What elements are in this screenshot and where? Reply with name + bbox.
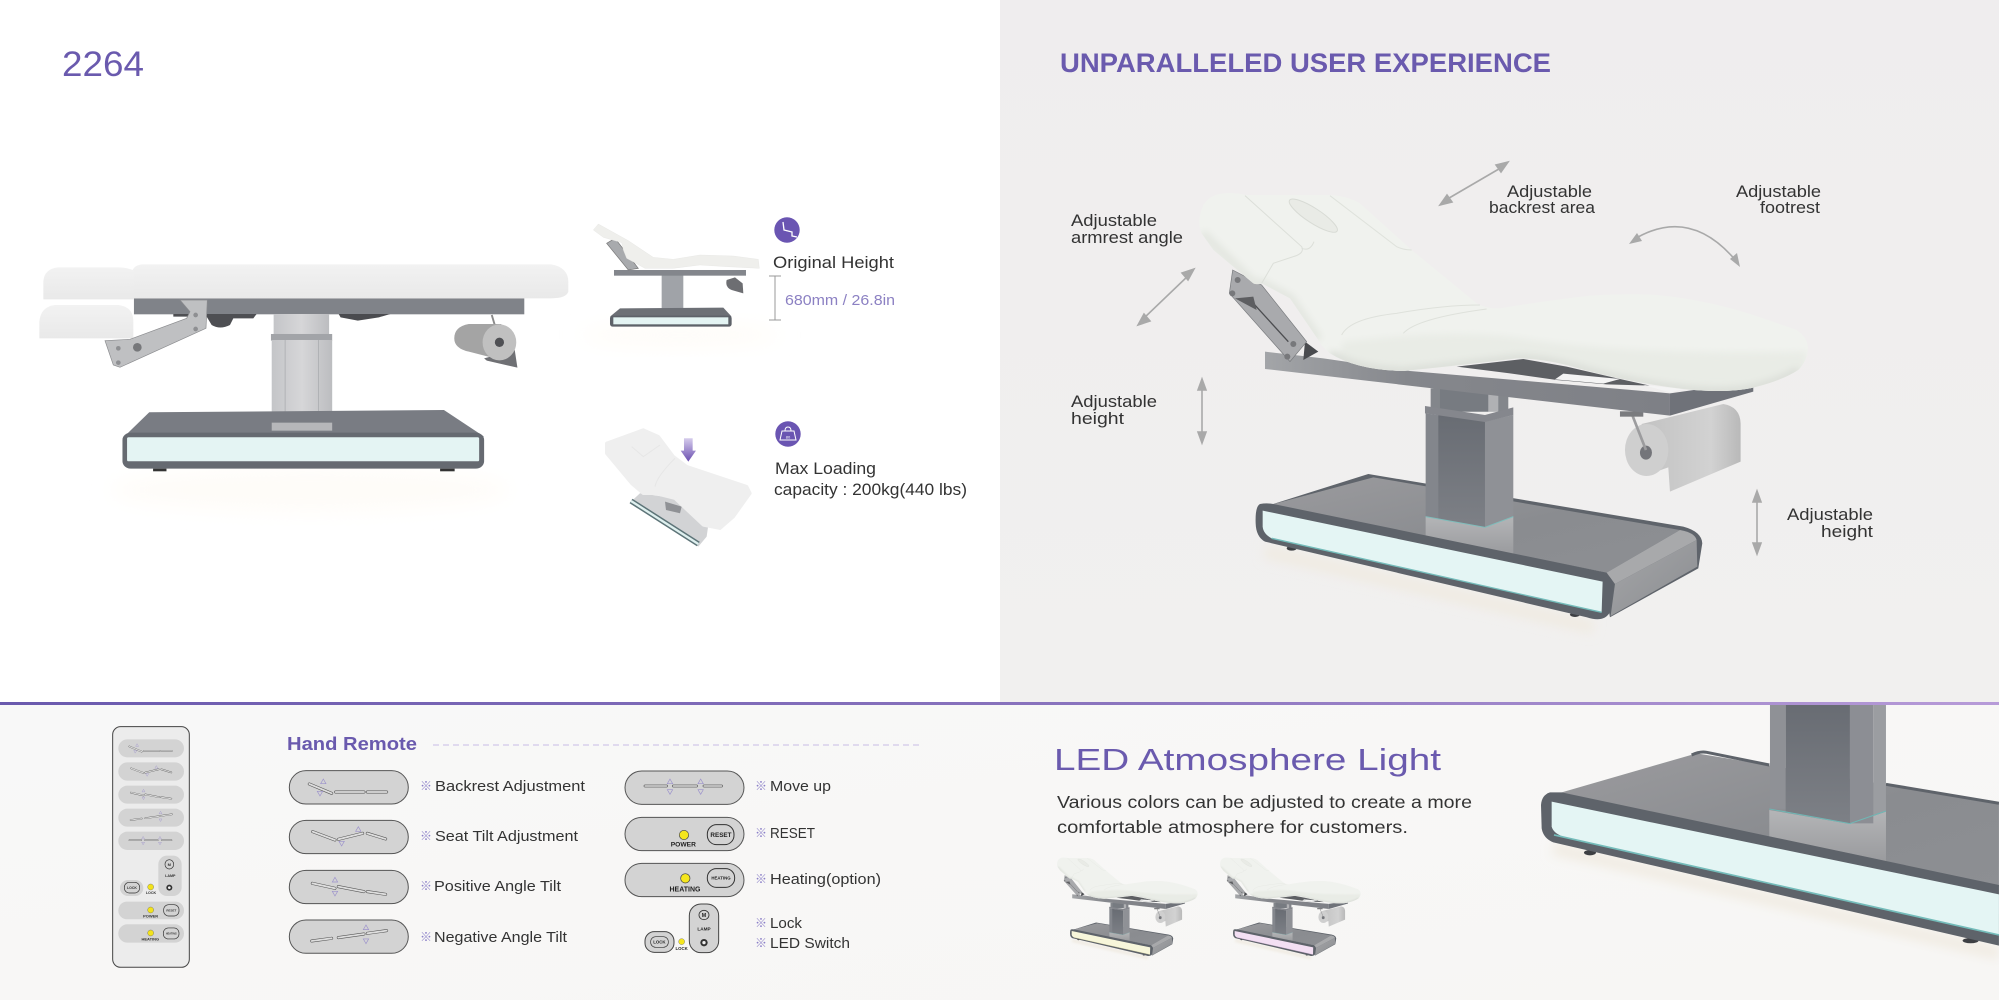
label: height left: Adjustable (1071, 393, 1157, 411)
label: height left: height (1071, 410, 1125, 428)
panel: remote control: LAMP (165, 874, 176, 878)
labels: right button column: ※ (755, 779, 767, 793)
icon: weight (775, 421, 801, 447)
label: footrest: footrest (1760, 199, 1821, 217)
labels: right button column: Move up (770, 778, 831, 795)
panel: remote control: HEATING (142, 937, 159, 942)
label: height right (1787, 506, 1874, 541)
panel: remote control: POWER (143, 913, 158, 918)
armrest cushion (39, 305, 133, 338)
icon: chair height (774, 217, 800, 243)
button: move up (625, 771, 744, 804)
button: reset (625, 817, 744, 851)
labels: left button column: Backrest Adjustment (435, 778, 586, 795)
labels: left button column: Seat Tilt Adjustment (435, 828, 579, 845)
heading: LED atmosphere light: LED Atmosphere Light (1054, 742, 1441, 777)
labels: left button column: ※ (420, 879, 432, 893)
panel: remote control: HEATING (166, 933, 177, 936)
image: small bed with pink light (1220, 858, 1361, 958)
button: heating (625, 863, 744, 897)
label: height left (1071, 393, 1157, 428)
buttons: lamp and lock: LOCK (676, 946, 689, 951)
button: reset: RESET (710, 832, 732, 839)
head cushion (43, 267, 134, 299)
labels: left button column: ※ (420, 829, 432, 843)
label: backrest area: backrest area (1489, 199, 1596, 217)
label: armrest angle (1071, 212, 1183, 247)
text: max loading (774, 460, 967, 499)
bracket (105, 300, 207, 367)
label: height right: Adjustable (1787, 506, 1873, 524)
label: backrest area: Adjustable (1507, 183, 1592, 201)
labels: right button column: ※ (755, 872, 767, 886)
button: heating: HEATING (711, 876, 731, 881)
under-frame mechanism (173, 314, 257, 327)
mattress (132, 264, 568, 298)
arrow: load down (681, 438, 696, 462)
buttons: lamp and lock: LOCK (653, 940, 666, 945)
panel: grey user experience background (1000, 0, 1999, 702)
heading: unparalleled user experience: UNPARALLELED USER EXPERIENCE (1060, 48, 1551, 78)
text: height value: 680mm / 26.8in (785, 292, 895, 309)
labels: right button column: RESET (770, 825, 815, 842)
label: height right: height (1821, 523, 1874, 541)
label: armrest angle: armrest angle (1071, 229, 1183, 247)
panel: bottom background (0, 705, 1999, 1000)
button: backrest adjustment (289, 771, 408, 804)
labels: right button column (755, 778, 881, 952)
arrow: curved footrest (1629, 227, 1740, 267)
labels: left button column (420, 778, 586, 946)
height dimension bracket (769, 276, 781, 320)
heading: hand remote: Hand Remote (287, 733, 417, 754)
panel: remote control: LOCK (146, 891, 157, 895)
button: seat tilt adjustment (289, 820, 408, 854)
buttons: lamp and lock: M (702, 913, 707, 919)
label: backrest area (1489, 183, 1596, 217)
label: footrest (1736, 183, 1821, 217)
text: LED description (1057, 792, 1472, 837)
image: small bed original height (580, 224, 780, 347)
buttons: lamp and lock (645, 904, 719, 953)
image: small bed with yellow light (1057, 858, 1198, 958)
labels: left button column: ※ (420, 930, 432, 944)
labels: right button column: ※ (755, 826, 767, 840)
text: max loading: capacity : 200kg(440 lbs) (774, 481, 967, 499)
panel: remote control: LOCK (127, 886, 137, 890)
labels: right button column: LED Switch (770, 935, 850, 952)
arrow: height right (1753, 491, 1761, 554)
panel: remote control: M (168, 862, 172, 867)
panel: remote control (113, 727, 189, 967)
arrow: armrest angle (1138, 269, 1194, 325)
labels: left button column: ※ (420, 779, 432, 793)
panel: remote control: RESET (166, 908, 176, 912)
paper roll (492, 315, 499, 341)
label: footrest: Adjustable (1736, 183, 1821, 201)
text: LED description: Various colors can be adjusted to create a more (1057, 792, 1472, 812)
labels: left button column: Positive Angle Tilt (434, 878, 562, 895)
icon: weight: 80 (786, 434, 791, 440)
button: positive angle tilt (289, 870, 408, 904)
button: heating: HEATING (670, 886, 700, 893)
image: top view bed with load (607, 430, 750, 547)
labels: right button column: Lock (770, 915, 803, 932)
labels: right button column: Heating(option) (770, 871, 881, 888)
text: original height: Original Height (773, 254, 895, 272)
labels: left button column: Negative Angle Tilt (434, 929, 568, 946)
panel: white specs background (0, 0, 1000, 702)
title: model number: 2264 (62, 45, 144, 84)
text: LED description: comfortable atmosphere for customers. (1057, 817, 1408, 837)
text: max loading: Max Loading (775, 460, 876, 478)
base (122, 410, 484, 438)
arrow: backrest area (1440, 162, 1508, 205)
button: negative angle tilt (289, 920, 408, 953)
labels: right button column: ※ (755, 916, 767, 930)
buttons: lamp and lock: LAMP (697, 926, 711, 931)
labels: right button column: ※ (755, 936, 767, 950)
button: reset: POWER (671, 842, 696, 849)
image: side view of bed (39, 264, 568, 512)
image: perspective bed (1199, 193, 1808, 627)
label: armrest angle: Adjustable (1071, 212, 1157, 230)
image: base close-up (1541, 705, 1999, 953)
arrow: height left (1198, 379, 1206, 443)
divider: purple line (0, 702, 1999, 705)
